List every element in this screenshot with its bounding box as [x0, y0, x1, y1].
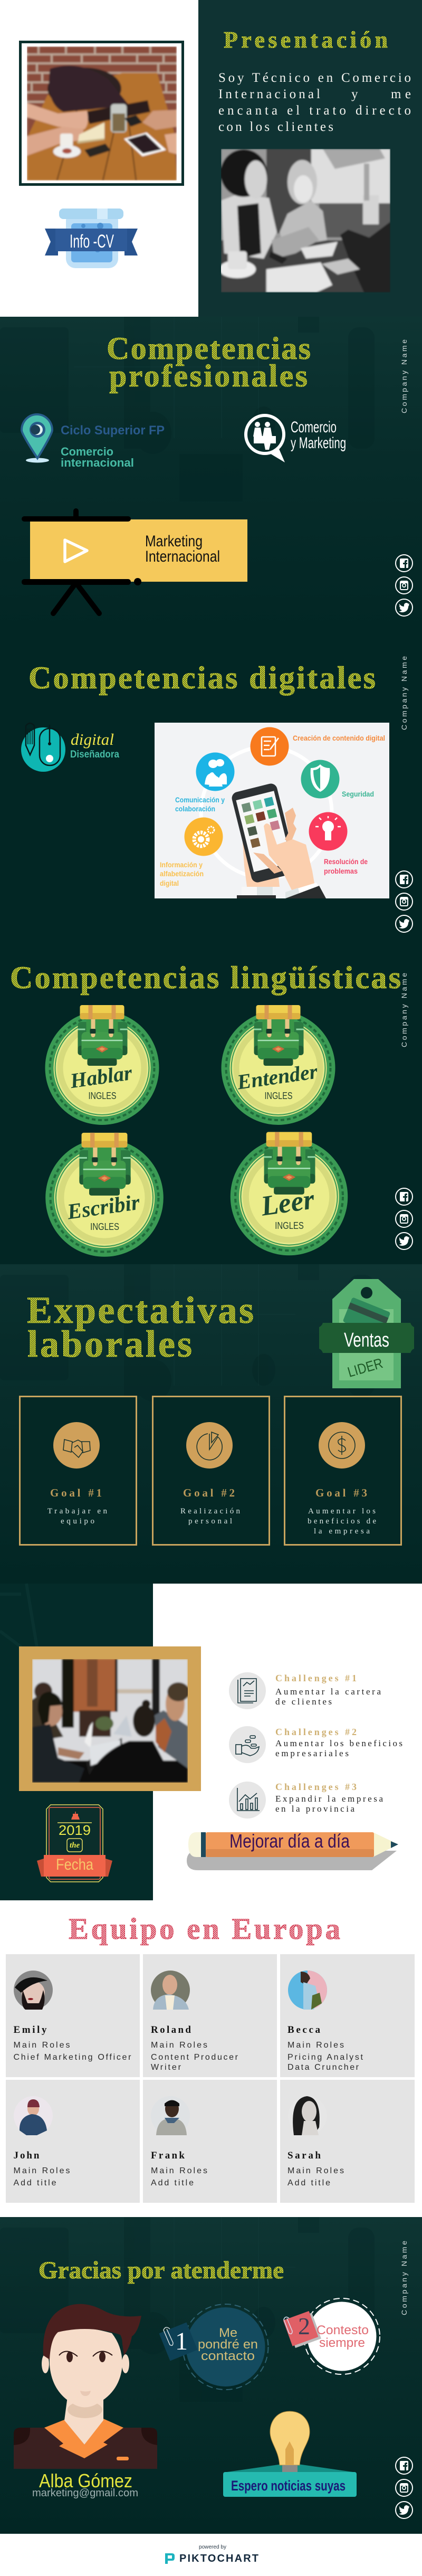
card: goal 2: Goal #2 [183, 1486, 235, 1499]
avatar: Sarah [293, 2096, 320, 2135]
list: challenge 2: Aumentar los beneficios [275, 1738, 402, 1748]
list: challenge 2 [229, 1726, 402, 1763]
text block: introduction: Soy Técnico en Comercio [218, 71, 411, 85]
badge: Hablar: Hablar [68, 1060, 134, 1093]
callout: me pondré en contacto: contacto [201, 2349, 255, 2363]
icon: Info-CV jar with ribbon: Info -CV [70, 231, 114, 252]
badge: fecha 2019 [37, 1805, 112, 1882]
card: goal 1 [20, 1397, 136, 1545]
label: company name: Company Name [400, 339, 408, 413]
icon: Info-CV jar with ribbon [45, 209, 138, 268]
list: challenge 3 [229, 1782, 383, 1819]
labels: digital competences: Resolución de [324, 857, 368, 866]
badge: fecha 2019: the [70, 1841, 80, 1850]
card: John: Add title [14, 2179, 56, 2187]
card: Emily: Main Roles [14, 2041, 70, 2050]
list: challenge 3: Expandir la empresa [275, 1794, 383, 1804]
card: Frank: Frank [151, 2150, 185, 2161]
card: Frank: Add title [151, 2179, 194, 2187]
heading: Competencias profesionales: Competencias [107, 331, 311, 366]
label: company name: Company Name [400, 656, 408, 730]
card: Sarah: Add title [287, 2179, 330, 2187]
text block: ciclo superior: Ciclo Superior FP [61, 423, 165, 438]
footer: powered by piktochart [0, 2534, 422, 2576]
card: Frank: Main Roles [151, 2166, 207, 2175]
labels: digital competences: alfabetización [160, 869, 204, 878]
card: Becca: Pricing Analyst [287, 2053, 363, 2062]
card: Roland: Main Roles [151, 2041, 207, 2050]
panel: competencias profesionales background [0, 317, 422, 636]
panel: expectativas background [0, 1264, 422, 1584]
panel: left dark column [0, 1584, 153, 1900]
list: challenge 1: Aumentar la cartera [275, 1687, 381, 1697]
card: Emily [6, 1954, 140, 2077]
icon: pencil banner: Mejorar día a día [229, 1830, 350, 1852]
card: Becca [280, 1954, 415, 2077]
icon: map pin [22, 414, 52, 462]
heading: Competencias profesionales [107, 331, 311, 393]
card: goal 3 [285, 1397, 401, 1545]
text: contact name: Alba Gómez [39, 2470, 132, 2492]
callout: me pondré en contacto: pondré en [198, 2337, 258, 2352]
callout: espero noticias suyas with bulb: Espero noticias suyas [231, 2478, 346, 2494]
callout: contesto siempre [283, 2298, 380, 2374]
card: goal 2: Realización [180, 1507, 241, 1516]
text: digital diseñadora: Diseñadora [70, 749, 119, 760]
text block: introduction: y [351, 87, 358, 101]
title: Presentación: Presentación [224, 27, 388, 53]
card: Emily: Emily [14, 2024, 47, 2035]
text block: ciclo superior: internacional [61, 456, 134, 469]
icon: handshake [63, 1439, 90, 1457]
callout: espero noticias suyas with bulb [223, 2411, 357, 2497]
card: John [6, 2080, 140, 2203]
card: Roland [143, 1954, 277, 2077]
badge: Escribir: INGLES [90, 1221, 119, 1232]
badge: Entender: INGLES [265, 1091, 292, 1101]
icon: report [238, 1679, 256, 1703]
list: challenge 1: de clientes [275, 1697, 332, 1707]
callout: me pondré en contacto: Me [219, 2326, 237, 2340]
illustration: avatar Alba [14, 2304, 157, 2469]
text block: ciclo superior [61, 423, 165, 469]
labels: digital competences: Comunicación y [175, 795, 225, 804]
card: Becca: Data Cruncher [287, 2063, 359, 2072]
icons: social media row three [396, 1188, 413, 1249]
card: Becca: Main Roles [287, 2041, 344, 2050]
card: Emily: Chief Marketing Officer [14, 2053, 131, 2062]
illustration: hands holding phone [231, 782, 326, 898]
icon: ventas lider tag: LIDER [346, 1355, 385, 1380]
text: comercio y marketing [291, 419, 346, 452]
card: goal 3: Goal #3 [315, 1486, 367, 1499]
list: challenge 2: empresariales [275, 1748, 349, 1758]
text block: introduction: encanta el trato directo [218, 103, 411, 118]
labels: digital competences: colaboración [175, 804, 215, 813]
heading: Competencias digitales: Competencias digitales [28, 660, 376, 695]
icon: ventas lider tag: Ventas [344, 1329, 389, 1351]
text: digital diseñadora [70, 730, 119, 760]
chart: digital competences diagram [155, 723, 389, 898]
icons: social media row one [396, 555, 413, 616]
panel: presentation background [0, 0, 422, 317]
labels: digital competences: Información y [160, 860, 203, 869]
avatar: John [19, 2099, 47, 2135]
icon: pencil banner [187, 1830, 398, 1870]
callout: contesto siempre: siempre [319, 2336, 365, 2350]
text block: introduction [218, 71, 411, 134]
badge: Entender [222, 1005, 335, 1125]
card: goal 2 [153, 1397, 269, 1545]
text: contact name: marketing@gmail.com [32, 2487, 138, 2499]
card: Sarah: Sarah [287, 2150, 321, 2161]
photo: table meeting with frame [19, 41, 184, 186]
footer: powered by piktochart: powered by [199, 2544, 226, 2550]
footer: powered by piktochart: PIKTOCHART [179, 2553, 258, 2564]
list: challenge 3: en la provincia [275, 1804, 354, 1814]
panel: challenges white background [153, 1584, 422, 1900]
node: content creation [250, 727, 289, 765]
callout: me pondré en contacto: 1 [175, 2327, 188, 2355]
text block: ciclo superior: Comercio [61, 445, 113, 458]
heading: Gracias por atenderme: Gracias por atenderme [39, 2257, 284, 2284]
card: Roland: Writer [151, 2063, 181, 2072]
labels: digital competences: problemas [324, 867, 358, 875]
title: Equipo en Europa: Equipo en Europa [69, 1912, 340, 1946]
icon: speech bubble shop [246, 415, 285, 462]
avatar: Frank [156, 2100, 187, 2135]
badge: Escribir [45, 1133, 164, 1257]
avatar: Becca [288, 1971, 327, 2010]
icon: digital mouse and pencil [21, 723, 65, 772]
badge: Entender: Entender [235, 1059, 319, 1094]
photo: team at laptops with gold frame [19, 1646, 201, 1791]
card: goal 1: Goal #1 [50, 1486, 102, 1499]
panel: dark background for digital and language sections [0, 633, 422, 1264]
card: John: Main Roles [14, 2166, 70, 2175]
avatar: Roland [151, 1971, 190, 2010]
text: digital diseñadora: digital [71, 730, 114, 749]
label: company name: Company Name [400, 973, 408, 1047]
icon: hand with coins [236, 1736, 259, 1756]
text: contact name [32, 2470, 138, 2499]
text block: introduction: me [391, 87, 411, 101]
card: Roland: Roland [151, 2024, 191, 2035]
badge: Hablar: INGLES [89, 1091, 116, 1101]
labels: digital competences: digital [160, 879, 179, 887]
icon: dollar coin [329, 1432, 355, 1459]
badge: Escribir: Escribir [65, 1190, 141, 1224]
heading: Expectativas laborales [27, 1289, 254, 1365]
text: comercio y marketing: Comercio [291, 419, 337, 436]
badge: Leer [231, 1132, 348, 1255]
icon: bar chart with trend [237, 1788, 260, 1811]
badge: Leer: Leer [258, 1183, 317, 1222]
card: Roland: Content Producer [151, 2053, 238, 2062]
card: Sarah [280, 2080, 415, 2203]
labels: digital competences: Creación de contenido digital [293, 734, 385, 742]
list: challenge 2: Challenges #2 [275, 1727, 357, 1737]
card: goal 2: personal [188, 1517, 232, 1526]
labels: digital competences [160, 734, 385, 887]
text block: introduction: con los clientes [218, 120, 333, 134]
card: goal 3: beneficios de [308, 1517, 376, 1526]
badge: Hablar [45, 1005, 159, 1125]
heading: Competencias profesionales: profesionales [109, 358, 308, 393]
card: goal 3: Aumentar los [308, 1507, 376, 1516]
panel: marketing internacional board: Marketing [145, 533, 203, 550]
node: communication [196, 753, 234, 791]
badge: Leer: INGLES [275, 1220, 304, 1231]
badge: fecha 2019: Fecha [56, 1856, 93, 1873]
icons: social media row four [396, 2457, 413, 2518]
list: challenge 3: Challenges #3 [275, 1782, 357, 1792]
icon: pie chart [197, 1432, 222, 1460]
node: information [185, 817, 223, 856]
callout: me pondré en contacto [159, 2304, 268, 2390]
card: Sarah: Main Roles [287, 2166, 344, 2175]
icon: ventas lider tag [319, 1279, 414, 1388]
callout: contesto siempre: Contesto [316, 2323, 369, 2337]
callout: contesto siempre: 2 [298, 2313, 310, 2340]
badge: fecha 2019: 2019 [59, 1822, 91, 1838]
list: challenge 1: Challenges #1 [275, 1673, 357, 1683]
heading: Competencias lingüísticas: Competencias lingüísticas [10, 960, 401, 995]
card: Frank [143, 2080, 277, 2203]
text block: introduction: Internacional [218, 87, 320, 101]
card: goal 3: la empresa [314, 1527, 370, 1536]
node: security [301, 760, 340, 798]
heading: Expectativas laborales: laborales [27, 1323, 192, 1365]
node: problem solving [309, 812, 347, 851]
card: Becca: Becca [287, 2024, 321, 2035]
labels: digital competences: Seguridad [342, 790, 374, 798]
card: goal 1: equipo [61, 1517, 94, 1526]
panel: thanks background [0, 2217, 422, 2536]
text: comercio y marketing: y Marketing [291, 434, 346, 452]
card: John: John [14, 2150, 40, 2161]
avatar: Emily [14, 1971, 53, 2010]
panel: marketing internacional board: Internacional [145, 548, 220, 565]
icons: social media row two [396, 871, 413, 932]
photo: women laughing in black and white [221, 149, 390, 292]
heading: Expectativas laborales: Expectativas [27, 1289, 254, 1331]
label: company name: Company Name [400, 2241, 408, 2315]
panel: marketing internacional board [22, 511, 247, 613]
card: goal 1: Trabajar en [47, 1507, 108, 1516]
list: challenge 1 [229, 1672, 381, 1709]
